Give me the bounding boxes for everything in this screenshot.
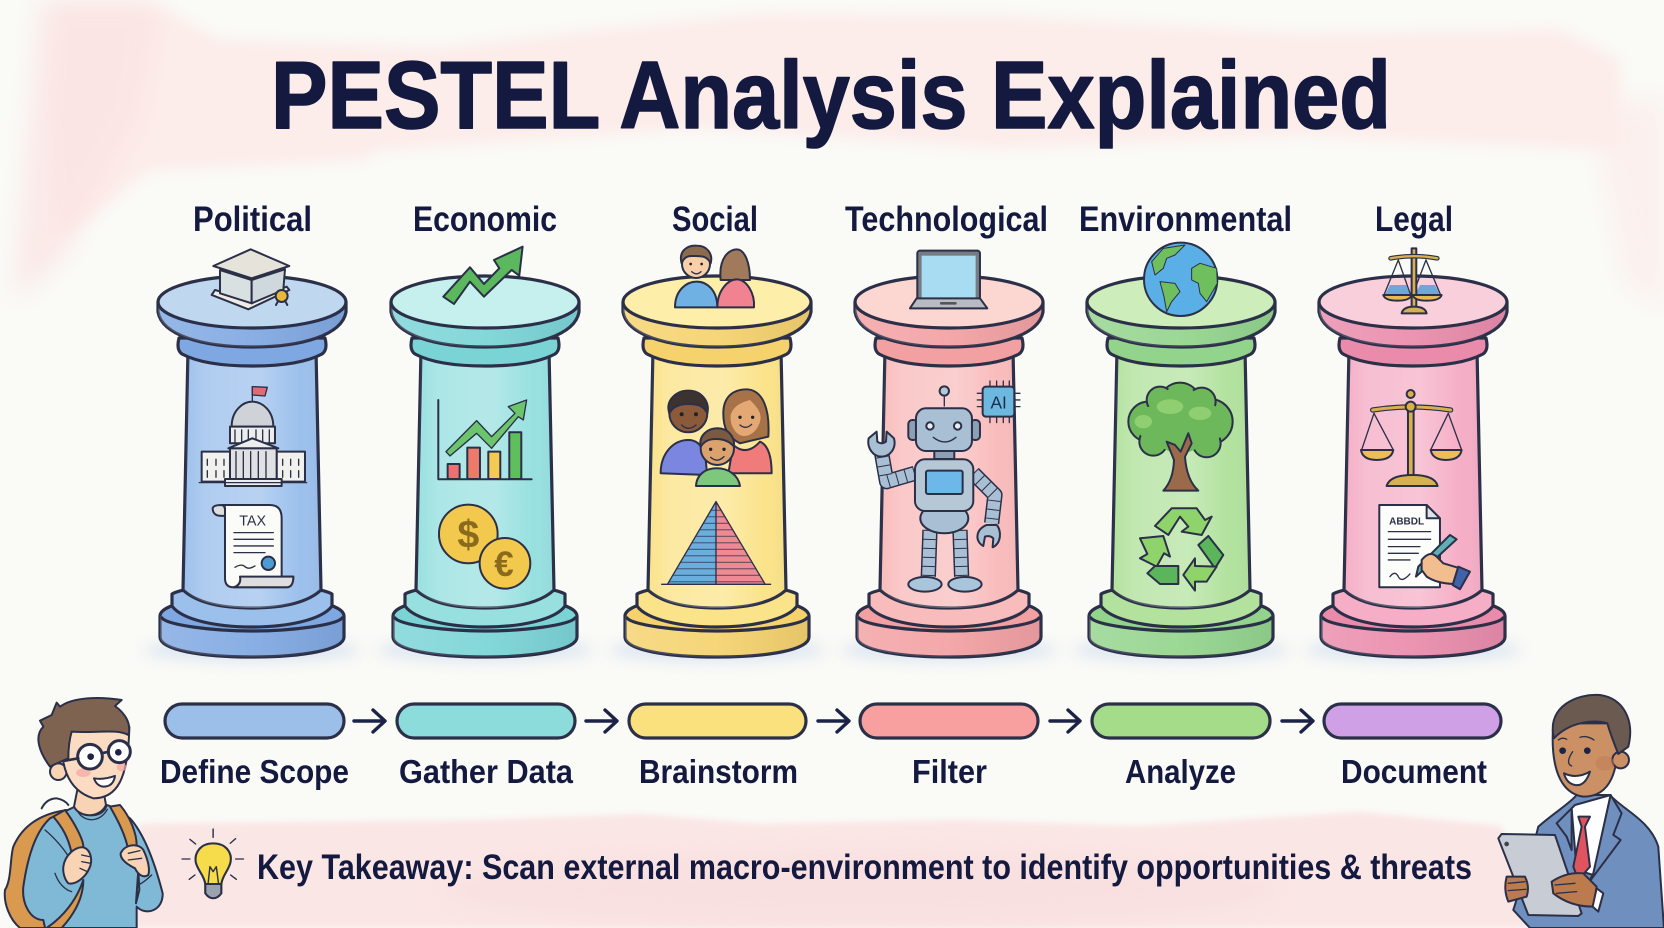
character: student with backpack <box>5 698 163 928</box>
step label: Gather Data: Gather Data <box>399 753 574 790</box>
step label: Define Scope: Define Scope <box>160 753 349 790</box>
icon: recycle symbol <box>1140 508 1223 591</box>
icon: globe <box>1144 243 1217 316</box>
column body: coral <box>841 276 1057 662</box>
icon: capitol building <box>199 387 307 486</box>
step bar: Document <box>1324 704 1501 738</box>
title: PESTEL Analysis Explained <box>271 42 1391 149</box>
key takeaway text: Key Takeaway: Scan external macro-environment to identify opportunities & threats <box>257 848 1472 887</box>
heading: Economic: Economic <box>413 200 557 239</box>
icon: currency coins: € <box>494 545 514 584</box>
icon: signed document <box>1379 505 1470 589</box>
pillar: Environmental <box>1073 200 1292 662</box>
icon: bar chart with trend arrow <box>438 400 532 479</box>
icon: family <box>661 389 772 486</box>
step bar: Analyze <box>1092 704 1270 738</box>
icon: signed document: ABBDL <box>1389 517 1424 528</box>
icons: social <box>661 246 772 584</box>
heading: Technological: Technological <box>845 200 1048 239</box>
step label: Filter: Filter <box>912 753 987 790</box>
icon: small scales <box>1383 248 1442 313</box>
process flow: six steps <box>160 704 1501 790</box>
icon: AI chip <box>977 381 1020 423</box>
icon: currency coins <box>439 505 530 589</box>
pillar: Social <box>609 200 825 662</box>
icon: rising arrow <box>443 247 523 304</box>
icon: two people on top <box>675 246 754 307</box>
icons: political <box>199 249 307 587</box>
icons: technological <box>868 251 1020 592</box>
column body: yellow <box>609 276 825 662</box>
icons: economic <box>438 247 532 589</box>
arrow: step 2 to 3 <box>586 710 617 732</box>
step label: Analyze: Analyze <box>1125 753 1236 790</box>
heading: Legal: Legal <box>1375 200 1453 239</box>
arrow: step 3 to 4 <box>818 710 849 732</box>
pillar: Legal <box>1305 200 1521 662</box>
icon: light bulb <box>182 829 243 898</box>
icons: legal <box>1361 248 1470 589</box>
column body: teal <box>377 276 593 662</box>
step bar: Brainstorm <box>629 704 806 738</box>
character: businessman with tablet <box>1498 695 1664 928</box>
heading: Social: Social <box>672 200 758 239</box>
arrow: step 1 to 2 <box>354 710 385 732</box>
arrow: step 4 to 5 <box>1050 710 1080 732</box>
heading: Environmental: Environmental <box>1079 200 1292 239</box>
pillar: Technological <box>841 200 1057 662</box>
icon: AI chip: AI <box>990 392 1007 412</box>
step bar: Filter <box>860 704 1038 738</box>
icon: tree <box>1128 383 1233 491</box>
step bar: Define Scope <box>165 704 344 738</box>
icon: scales of justice <box>1361 390 1462 486</box>
icon: population pyramid <box>662 502 771 584</box>
icon: small government building <box>212 249 289 309</box>
column body: pink <box>1305 276 1521 662</box>
heading: Political: Political <box>193 200 312 239</box>
icon: currency coins: $ <box>457 513 479 557</box>
arrow: step 5 to 6 <box>1282 710 1313 732</box>
step label: Brainstorm: Brainstorm <box>639 753 798 790</box>
icon: laptop <box>910 251 987 308</box>
pillar: Political <box>144 200 360 662</box>
step bar: Gather Data <box>397 704 575 738</box>
icon: tax scroll: TAX <box>239 514 266 530</box>
icon: tax scroll <box>213 505 293 587</box>
step label: Document: Document <box>1341 753 1487 790</box>
pillar: Economic <box>377 200 593 662</box>
column body: green <box>1073 276 1289 662</box>
icons: environmental <box>1128 243 1233 591</box>
icon: robot <box>868 386 1000 592</box>
column body: blue <box>144 276 360 662</box>
